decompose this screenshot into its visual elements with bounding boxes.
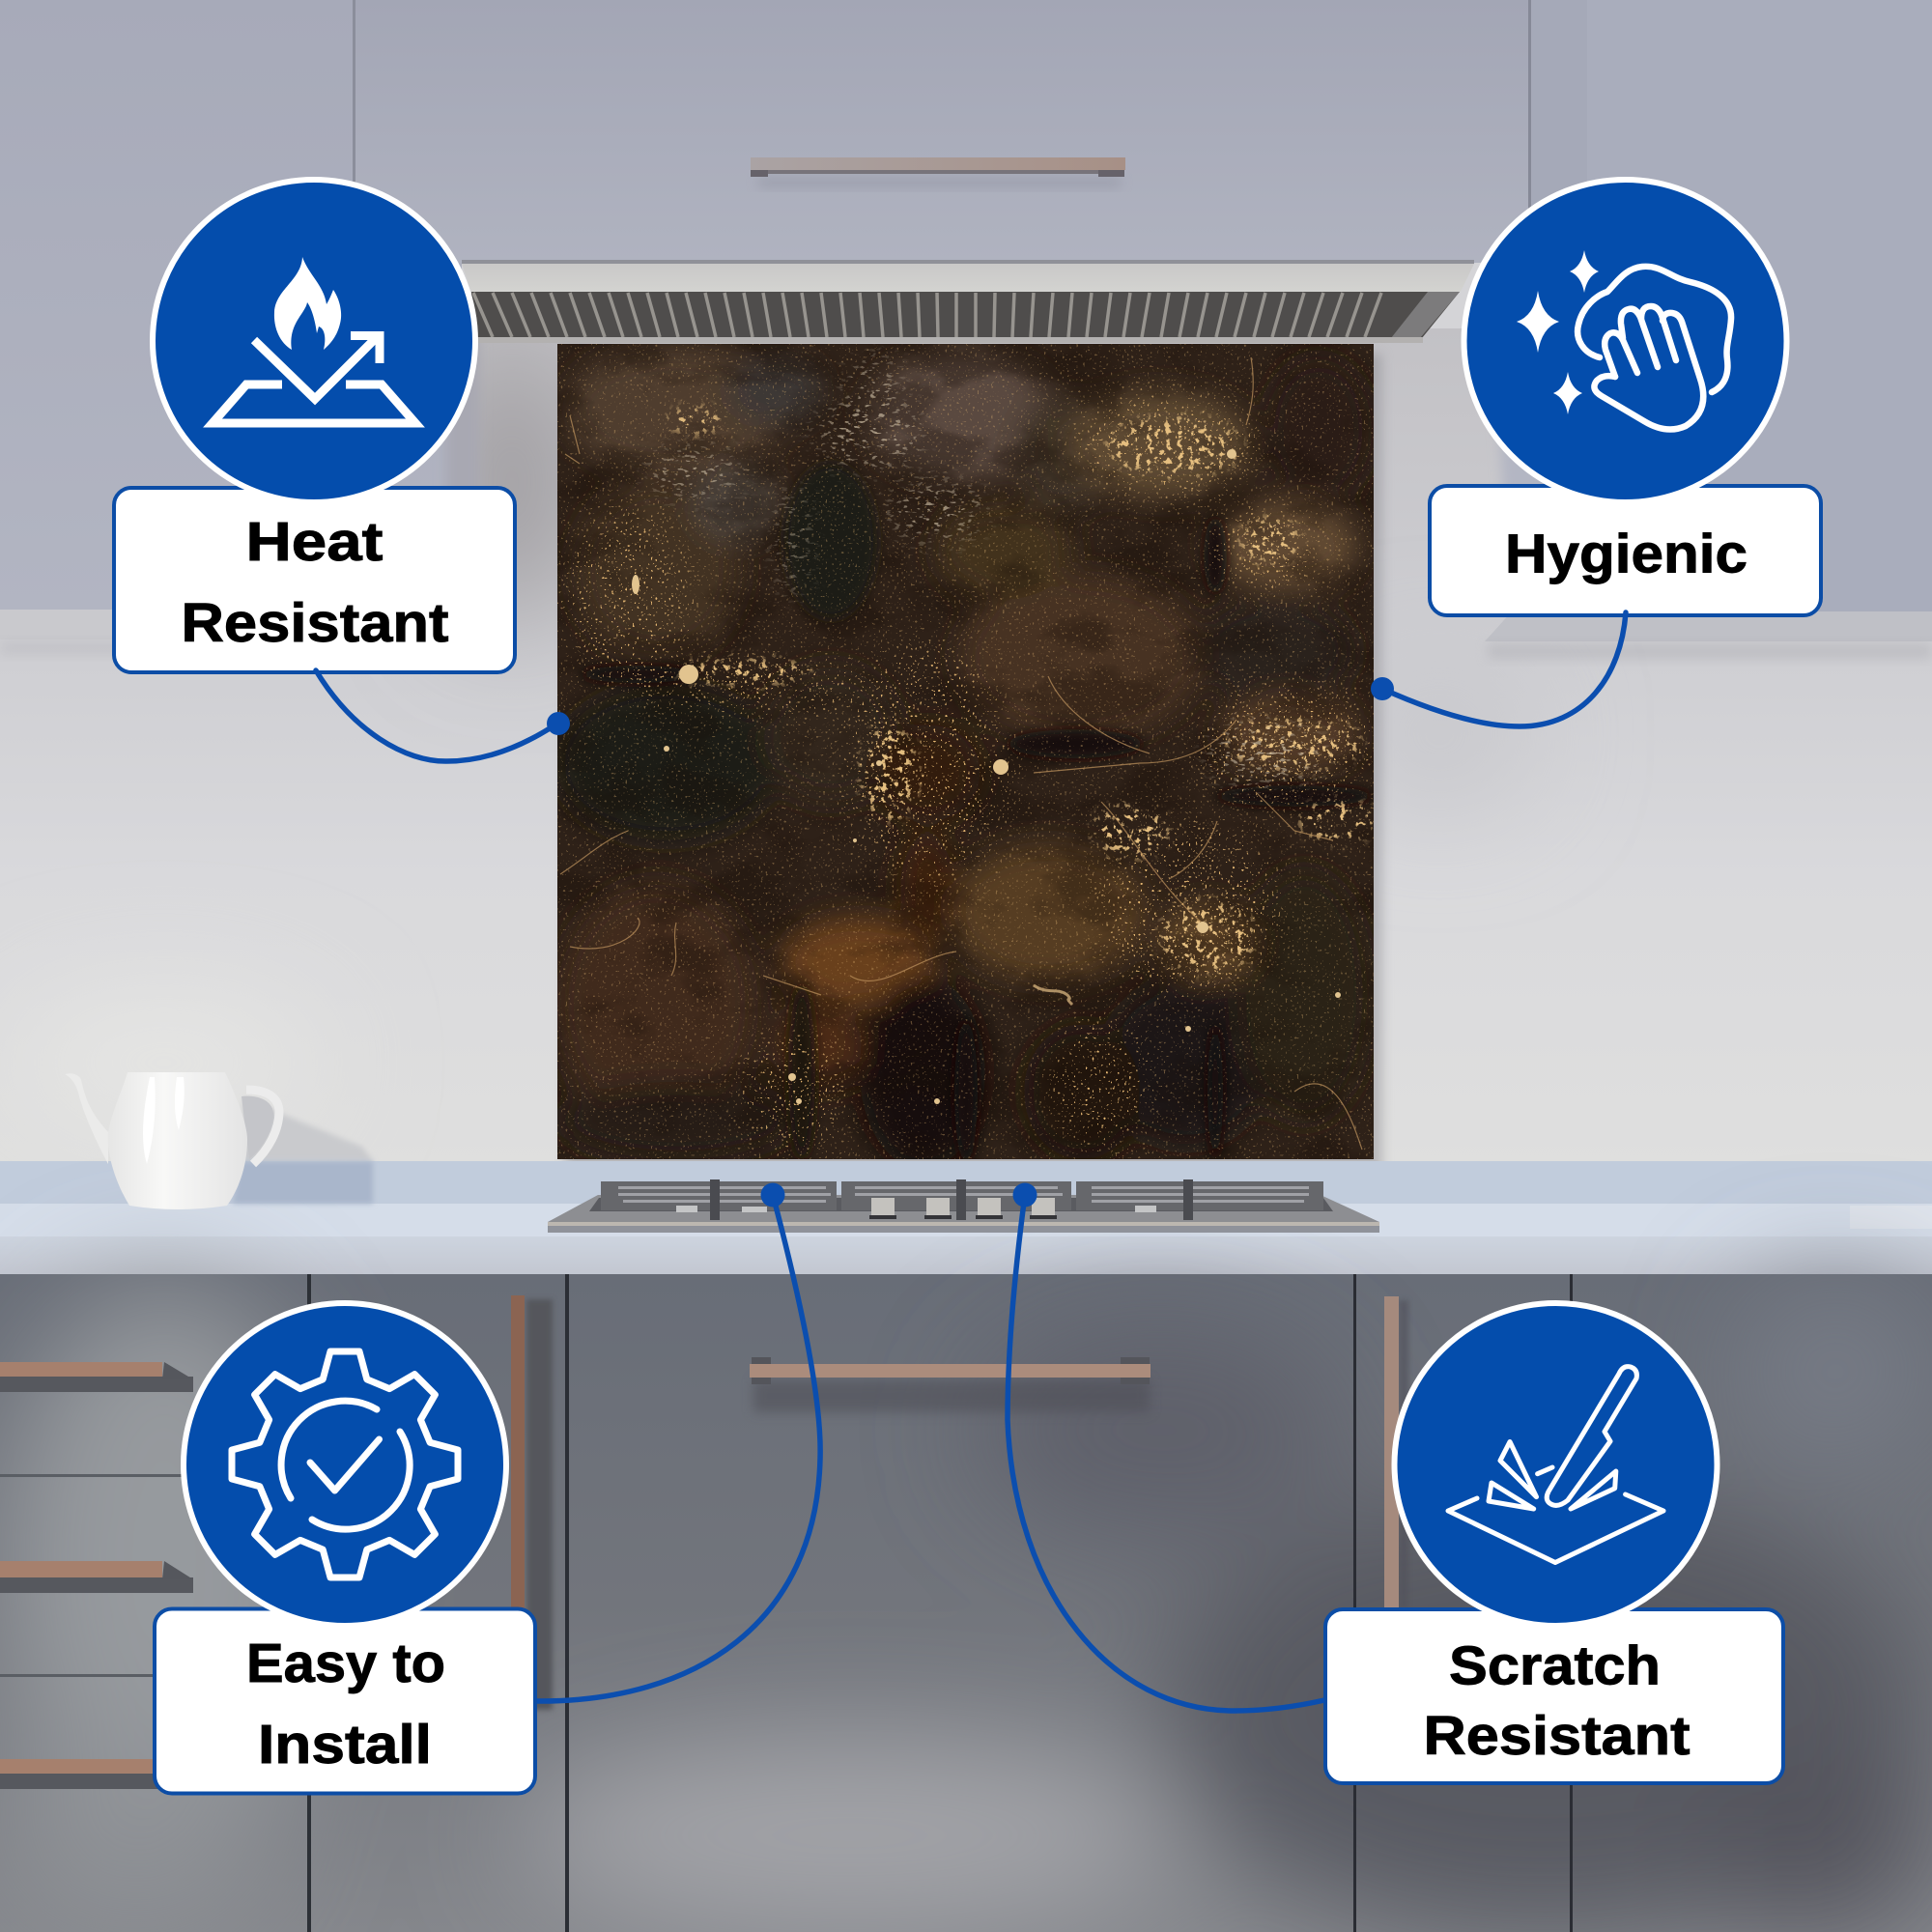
connector: heat resistant (316, 670, 570, 761)
connector: hygienic (1371, 612, 1626, 726)
gold veins (560, 357, 1362, 1150)
upper right cabinet (1492, 0, 1932, 611)
resistant text: Resistant (182, 592, 449, 654)
label box: easy to install (155, 1609, 535, 1793)
feature: hygienic (1371, 180, 1821, 726)
right shelf edge (1485, 611, 1932, 641)
label box: scratch resistant (1325, 1609, 1783, 1783)
feature: scratch resistant (1008, 1182, 1783, 1783)
heat resistant text: Heat (245, 511, 384, 573)
icon circle: hand (1464, 180, 1787, 502)
label box: heat resistant (114, 488, 515, 672)
icon: gear with check mark (232, 1351, 458, 1577)
marble shadow (565, 354, 1381, 1171)
tiled wall (0, 328, 1932, 1169)
icon: hand wiping with sparkles (1517, 250, 1731, 430)
connector: scratch resistant (1008, 1182, 1324, 1711)
dark shadow folds (580, 464, 1374, 1164)
feature: heat resistant (114, 180, 570, 761)
icon circle: knife (1395, 1303, 1718, 1626)
icon circle: flame (153, 180, 475, 502)
drawer handles (0, 1362, 193, 1789)
gold splashes (632, 449, 1341, 1104)
label box: hygienic (1430, 486, 1821, 615)
gas hob (548, 1179, 1379, 1233)
upper left cabinet (0, 0, 462, 610)
left shelf edge (0, 610, 464, 639)
marble splashback panel (555, 344, 1374, 1169)
feature: easy to install (155, 1182, 820, 1793)
countertop front edge (0, 1236, 1932, 1274)
lower cabinets (0, 1274, 1932, 1932)
right tall handle (1384, 1296, 1408, 1609)
left tall handle (511, 1295, 553, 1710)
countertop upstand (0, 1161, 1932, 1204)
icon circle: gear (184, 1303, 506, 1626)
upper centre cabinet (355, 0, 1529, 263)
resistant text: Resistant (1424, 1705, 1690, 1767)
install text: Install (258, 1714, 432, 1776)
easy to text: Easy to (246, 1633, 445, 1694)
hygienic text: Hygienic (1505, 524, 1747, 585)
icon: knife scratching surface (1448, 1367, 1663, 1563)
upper cabinet handle (751, 157, 1125, 187)
scratch text: Scratch (1449, 1634, 1661, 1696)
centre handle (750, 1357, 1151, 1412)
connector: easy to install (537, 1182, 820, 1701)
icon: flame over surface (213, 257, 415, 423)
countertop surface (0, 1204, 1932, 1236)
white teapot (65, 1072, 373, 1209)
cooker hood (462, 260, 1474, 343)
